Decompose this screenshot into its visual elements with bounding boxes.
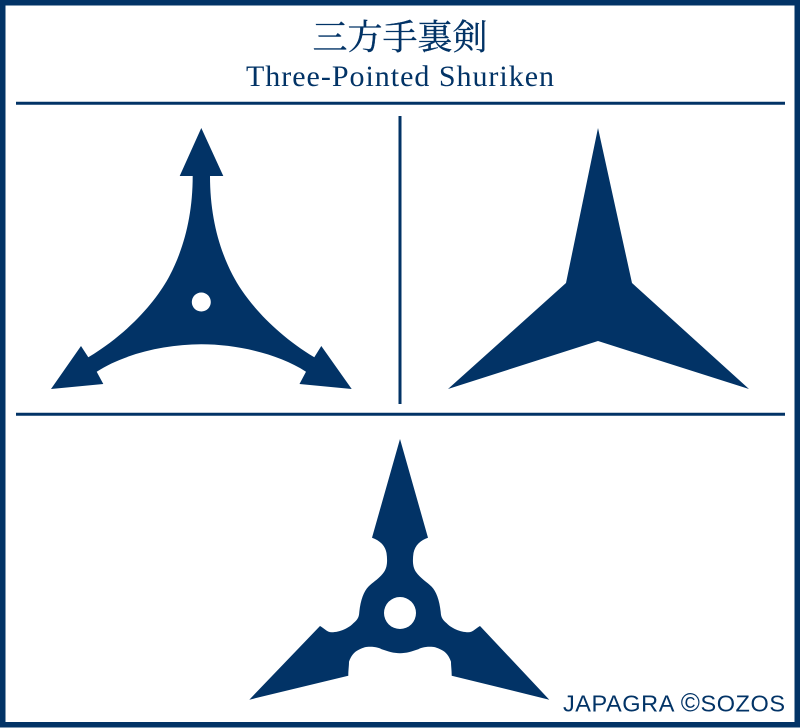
- icon: curved arrow shuriken: [51, 128, 352, 389]
- title: Japanese: 三方手裏剣: [312, 18, 488, 58]
- title: English: Three-Pointed Shuriken: [246, 60, 554, 93]
- credit: JAPAGRA ©SOZOS: [563, 688, 785, 718]
- icon: notched shuriken with central hole: [249, 439, 549, 700]
- icon: straight three-point shuriken: [448, 128, 749, 389]
